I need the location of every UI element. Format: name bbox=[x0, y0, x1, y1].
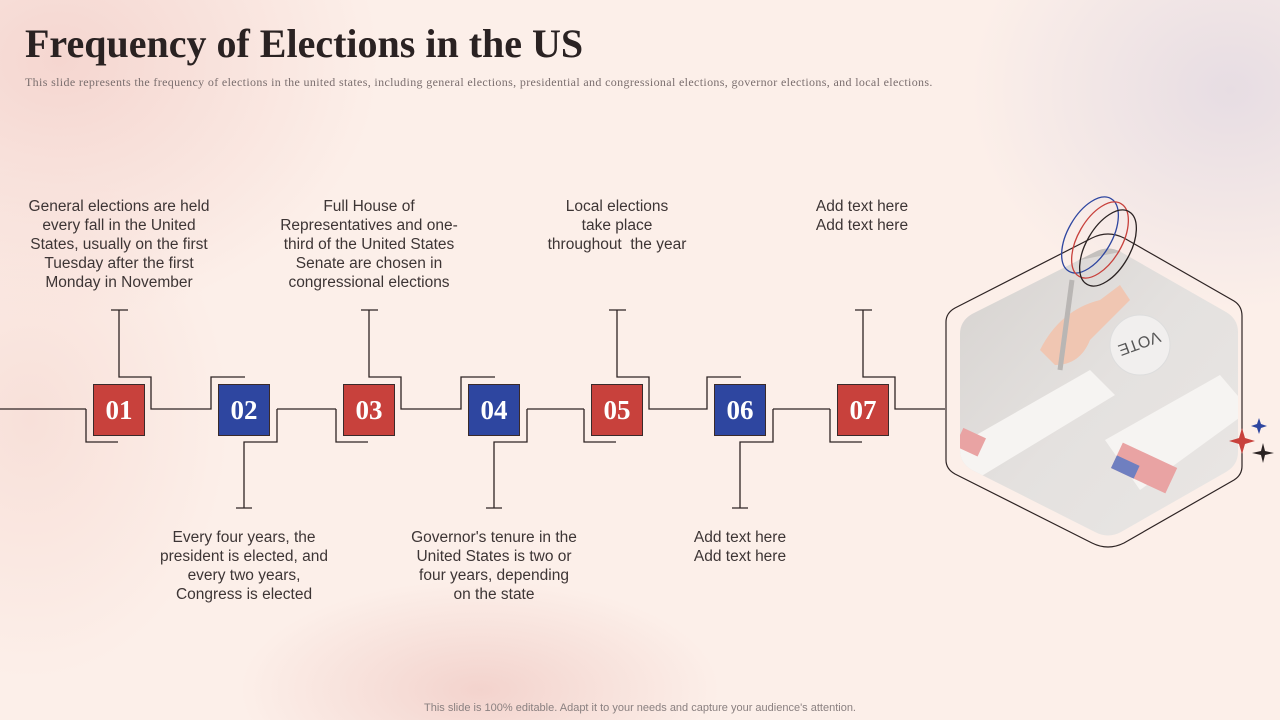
text 06 bbox=[694, 529, 786, 565]
subtitle: This slide represents the frequency of elections in the united states, including general elections, presidential and congressional elections, governor elections, and local elections. bbox=[25, 75, 933, 89]
text 03: Full House of Representatives and one-third of the United States Senate are chosen in congressional elections bbox=[280, 198, 458, 291]
hexagon photo bbox=[945, 196, 1274, 548]
text 02: Every four years, the president is elected, and every two years, Congress is elected bbox=[160, 529, 328, 603]
step 06 bbox=[714, 384, 766, 436]
text 06: Add text here bbox=[694, 548, 786, 565]
step 02 bbox=[218, 384, 270, 436]
step 03 bbox=[343, 384, 395, 436]
step 05 bbox=[591, 384, 643, 436]
text 07: Add text here bbox=[816, 217, 908, 234]
step 06: 06 bbox=[726, 395, 754, 425]
text 01: General elections are held every fall in the United States, usually on the first Tuesday after the first Monday in November bbox=[29, 198, 209, 291]
footer: This slide is 100% editable. Adapt it to your needs and capture your audience's attention. bbox=[424, 702, 856, 714]
step 03: 03 bbox=[356, 395, 382, 425]
step 01 bbox=[93, 384, 145, 436]
step 04: 04 bbox=[480, 395, 508, 425]
text 07: Add text here bbox=[816, 198, 908, 215]
text 07 bbox=[816, 198, 908, 234]
text 05: throughout the year bbox=[548, 236, 686, 253]
text 06: Add text here bbox=[694, 529, 786, 546]
step 05: 05 bbox=[604, 395, 630, 425]
step 02: 02 bbox=[230, 395, 258, 425]
text 05: Local elections bbox=[566, 198, 668, 215]
text 05: take place bbox=[582, 217, 652, 234]
text 05 bbox=[548, 198, 686, 253]
step 01: 01 bbox=[106, 395, 132, 425]
hexagon photo: VOTE bbox=[1116, 327, 1163, 358]
step 07 bbox=[837, 384, 889, 436]
title: Frequency of Elections in the US bbox=[25, 21, 583, 66]
step 04 bbox=[468, 384, 520, 436]
step 07: 07 bbox=[850, 395, 876, 425]
text 04: Governor's tenure in the United States is two or four years, depending on the state bbox=[411, 529, 577, 603]
